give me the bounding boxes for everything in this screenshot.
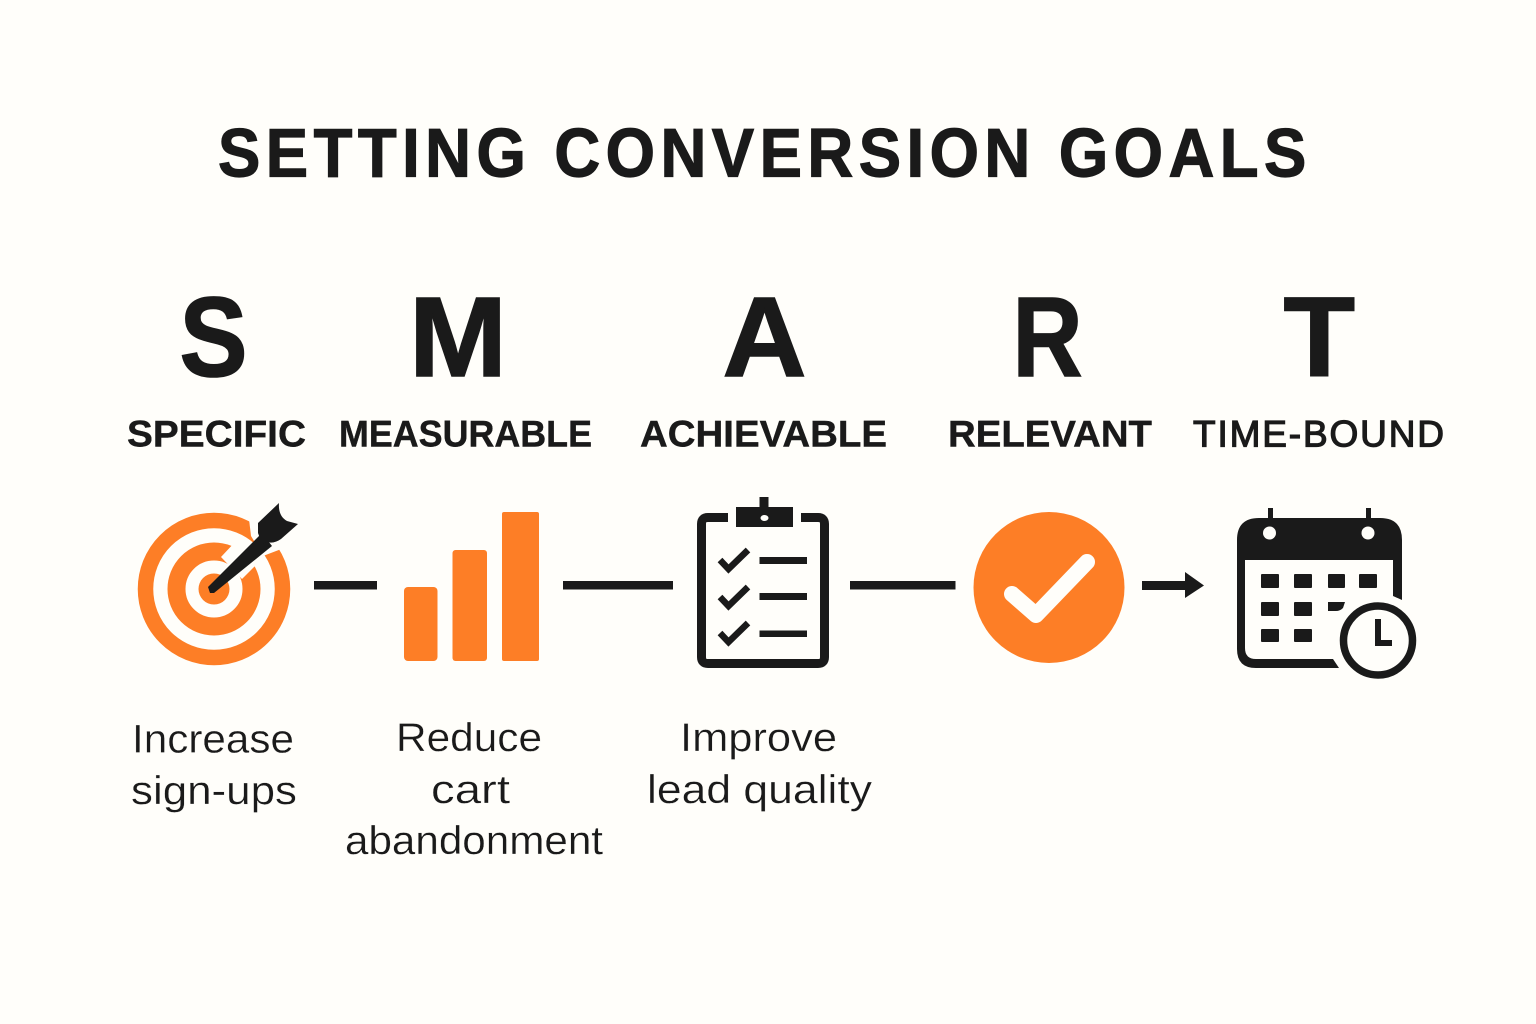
letter R: R — [1012, 274, 1082, 400]
icon: bar chart — [404, 512, 539, 661]
arrow: relevant to time-bound — [1142, 572, 1204, 598]
text: reduce cart abandonment: Reduce — [396, 716, 542, 760]
label: specific: SPECIFIC — [127, 414, 306, 454]
letter T: T — [1284, 274, 1355, 400]
label: achievable: ACHIEVABLE — [640, 414, 887, 454]
title: SETTING CONVERSION GOALS — [218, 115, 1306, 192]
text: reduce cart abandonment: cart — [431, 768, 510, 812]
label: relevant: RELEVANT — [948, 414, 1152, 454]
column: relevant — [948, 274, 1152, 663]
column: measurable — [339, 274, 603, 863]
letter S: S — [180, 274, 248, 400]
label: measurable: MEASURABLE — [339, 414, 592, 454]
icon: orange check circle — [974, 512, 1124, 663]
text: increase sign-ups: Increase — [132, 718, 294, 762]
letter M: M — [409, 274, 507, 400]
connector: measurable to achievable — [563, 581, 673, 590]
letter A: A — [722, 274, 806, 400]
icon: calendar with clock — [1237, 508, 1412, 675]
column: specific — [127, 274, 306, 813]
column: achievable — [640, 274, 887, 812]
text: reduce cart abandonment: abandonment — [345, 819, 603, 863]
text: improve lead quality: Improve — [680, 716, 837, 760]
text: increase sign-ups: sign-ups — [131, 769, 297, 813]
icon: target with arrow — [146, 503, 298, 658]
column: time-bound — [1193, 274, 1444, 675]
label: time-bound: TIME-BOUND — [1193, 414, 1444, 454]
icon: clipboard checklist — [702, 497, 824, 664]
connector: achievable to relevant — [850, 581, 956, 590]
connector: specific to measurable — [314, 581, 377, 590]
text: improve lead quality: lead quality — [647, 768, 872, 812]
